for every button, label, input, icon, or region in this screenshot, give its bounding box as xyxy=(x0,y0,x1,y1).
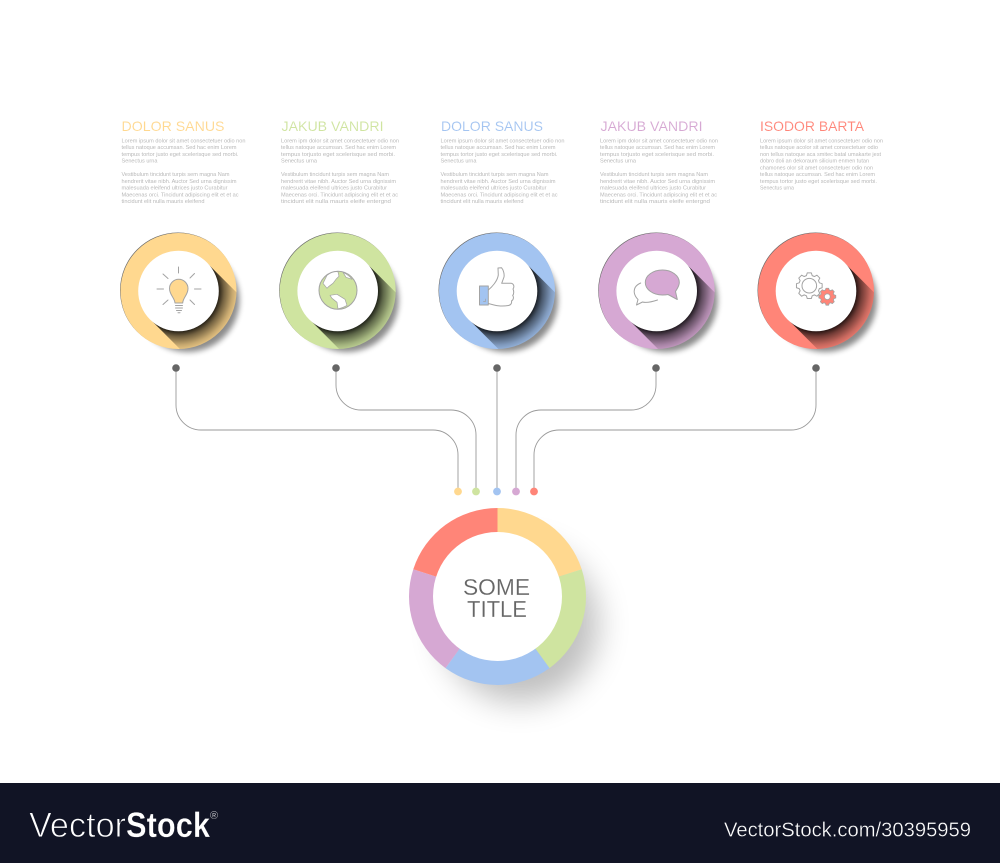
column 1 text: Dolor Sanus: Maecenas orci. Tincidunt adipiscing elit et et ac xyxy=(122,192,239,198)
column 5 text: Isodor Barta: Senectus urna xyxy=(760,186,795,192)
column 3 text: Dolor Sanus: DOLOR SANUS xyxy=(441,118,543,134)
icon: gears xyxy=(796,273,836,305)
column 3 text: Dolor Sanus: tempus tortor justo eget scelerisque sed morbi. xyxy=(440,152,558,158)
purple circle with speech bubbles icon xyxy=(598,232,722,356)
column 3 text: Dolor Sanus: hendrerit vitae nibh. Auctor Sed urna dignissim xyxy=(440,179,556,185)
column 5 text: Isodor Barta: tellus natoque accumsan. Sed hac enim Lorem xyxy=(760,172,875,178)
donut shadow xyxy=(442,546,598,702)
column 1 text: Dolor Sanus: malesuada eleifend ultrices justo Curabitur xyxy=(122,186,228,192)
column 2 text: Jakub Vandri: tincidunt elit nulla mauris eleife entergnd xyxy=(281,199,391,205)
icon: lightbulb xyxy=(157,267,201,313)
column 2 text: Jakub Vandri: Vestibulum tincidunt turpis sem magna Nam xyxy=(281,172,389,178)
column 5 text: Isodor Barta: ISODOR BARTA xyxy=(760,118,865,134)
footer url: VectorStock.com/30395959 xyxy=(724,820,971,842)
column 3 text: Dolor Sanus: Senectus urna xyxy=(440,159,477,165)
column 4 text: Jakub Vandri: tempus torjusto eget scelerisque sed morbi. xyxy=(600,152,714,158)
column 3 text: Dolor Sanus: malesuada eleifend ultrices justo Curabitur xyxy=(440,186,547,192)
column 5 text: Isodor Barta: Lorem ipsum dolor sit amet consectetuer odio non xyxy=(760,138,883,144)
column 1 text: Dolor Sanus: hendrerit vitae nibh. Auctor Sed urna dignissim xyxy=(122,179,237,185)
green circle with globe icon xyxy=(279,232,402,356)
registered mark: ® xyxy=(210,810,218,822)
column 4 text: Jakub Vandri: Senectus urna xyxy=(600,159,637,165)
icon: speech bubbles xyxy=(634,270,679,305)
column 2 text: Jakub Vandri: Senectus urna xyxy=(281,159,318,165)
footer logo: VectorStock xyxy=(29,806,210,845)
footer band xyxy=(0,783,1000,863)
column 4 text: Jakub Vandri: Vestibulum tincidunt turpis sem magna Nam xyxy=(600,172,708,178)
column 4 text: Jakub Vandri: Lorem ipm dolor sit amet consectetuer odio non xyxy=(600,138,718,144)
column 5 text: Isodor Barta: non tellus natoque aca smitec batal umakarte jest xyxy=(760,152,881,158)
column 3 text: Dolor Sanus: Maecenas orci. Tincidunt adipiscing elit et et ac xyxy=(440,192,558,198)
column 2 text: Jakub Vandri: Lorem ipm dolor sit amet consectetuer odio non xyxy=(281,138,399,144)
red circle with gears icon xyxy=(758,232,881,356)
column 2 text: Jakub Vandri: tempus torjusto eget scelerisque sed morbi. xyxy=(281,152,395,158)
center title: TITLE xyxy=(467,596,527,622)
column 5 text: Isodor Barta: dobro doli an dekoraum silicium enmen tutan xyxy=(760,159,869,165)
column 4 text: Jakub Vandri: JAKUB VANDRI xyxy=(600,118,702,134)
column 2 text: Jakub Vandri: JAKUB VANDRI xyxy=(282,118,384,134)
column 1 text: Dolor Sanus: Senectus urna xyxy=(122,159,158,165)
column 4 text: Jakub Vandri: tellus natoque accumsan. Sed hac enim Lorem xyxy=(600,145,715,151)
icon: thumbs up xyxy=(480,268,514,306)
column 4 text: Jakub Vandri: malesuada eleifend ultrices justo Curabitur xyxy=(600,186,706,192)
column 1 text: Dolor Sanus: Lorem ipsum dolor sit amet consectetuer odio non xyxy=(122,138,246,144)
column 5 text: Isodor Barta xyxy=(760,118,883,192)
column 2 text: Jakub Vandri xyxy=(281,118,399,205)
icon: globe xyxy=(319,271,357,309)
column 5 text: Isodor Barta: tempus tortor justo eget scelerisque sed morbi. xyxy=(760,179,877,185)
center title xyxy=(463,574,530,622)
column 5 text: Isodor Barta: chamones olor sit amet consectetuer odio non xyxy=(760,165,873,171)
column 2 text: Jakub Vandri: tellus natoque accumsan. Sed hac enim Lorem xyxy=(281,145,396,151)
column 1 text: Dolor Sanus: tellus natoque accumsan. Sed hac enim Lorem xyxy=(122,145,237,151)
yellow circle with lightbulb icon xyxy=(120,232,244,356)
column 1 text: Dolor Sanus: tempus tortor justo eget scelerisque sed morbi. xyxy=(122,152,239,158)
column 4 text: Jakub Vandri xyxy=(600,118,718,205)
column 1 text: Dolor Sanus: tincidunt elit nulla mauris eleifend xyxy=(122,199,204,205)
column 3 text: Dolor Sanus: tellus natoque accumsan. Sed hac enim Lorem xyxy=(440,145,556,151)
top connector dots xyxy=(172,364,820,372)
column 3 text: Dolor Sanus: Lorem ipsum dolor sit amet consectetuer odio non xyxy=(440,138,564,144)
donut segments xyxy=(409,508,586,685)
column 4 text: Jakub Vandri: Maecenas orci. Tincidunt adipiscing elit et et ac xyxy=(600,192,717,198)
column 3 text: Dolor Sanus: Vestibulum tincidunt turpis sem magna Nam xyxy=(440,172,549,178)
center donut with title xyxy=(409,508,598,702)
bottom colored dots xyxy=(454,488,538,495)
column 4 text: Jakub Vandri: tincidunt elit nulla mauris eleife entergnd xyxy=(600,199,710,205)
connector lines xyxy=(176,368,816,491)
column 2 text: Jakub Vandri: malesuada eleifend ultrices justo Curabitur xyxy=(281,186,387,192)
column 1 text: Dolor Sanus: DOLOR SANUS xyxy=(122,118,224,134)
column 1 text: Dolor Sanus: Vestibulum tincidunt turpis sem magna Nam xyxy=(122,172,230,178)
blue circle with thumbs-up icon xyxy=(438,232,562,356)
column 1 text: Dolor Sanus xyxy=(122,118,246,205)
column 2 text: Jakub Vandri: hendrerit vitae nibh. Auctor Sed urna dignissim xyxy=(281,179,396,185)
center title: SOME xyxy=(463,574,530,600)
column 3 text: Dolor Sanus xyxy=(440,118,564,205)
column 2 text: Jakub Vandri: Maecenas orci. Tincidunt adipiscing elit et et ac xyxy=(281,192,398,198)
column 3 text: Dolor Sanus: tincidunt elit nulla mauris eleifend xyxy=(440,199,524,205)
column 4 text: Jakub Vandri: hendrerit vitae nibh. Auctor Sed urna dignissim xyxy=(600,179,715,185)
column 5 text: Isodor Barta: tellus natoque acolor sit amet consectetuer odio xyxy=(760,145,878,151)
